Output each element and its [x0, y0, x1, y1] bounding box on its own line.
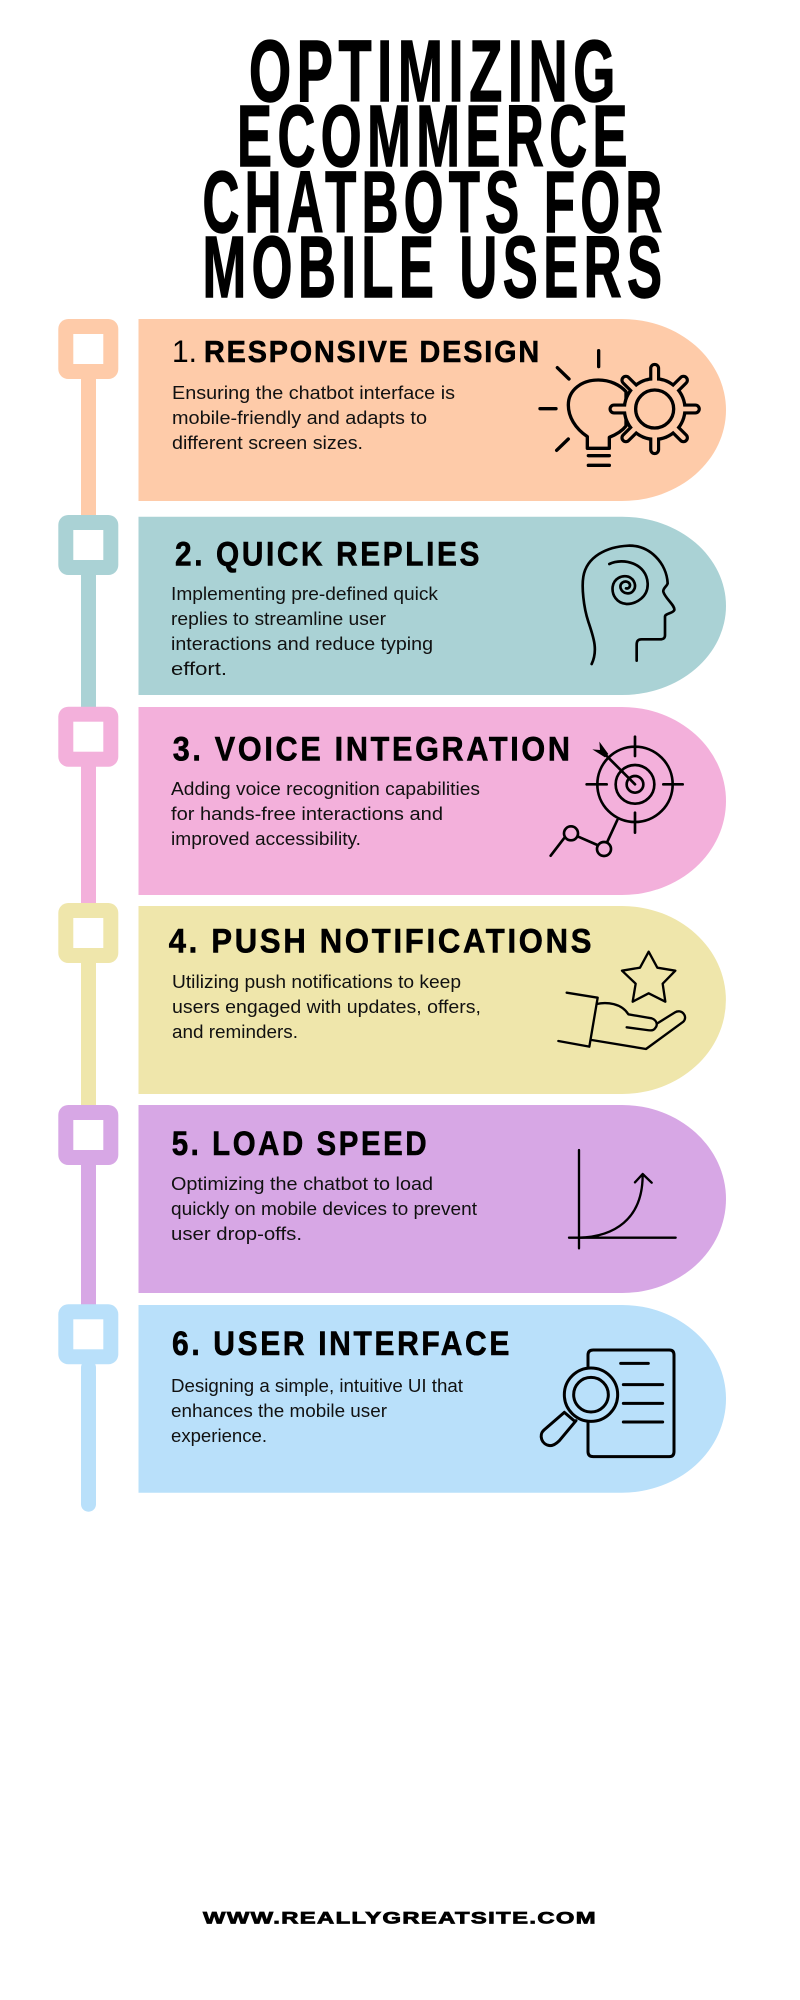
- heading: 3. VOICE INTEGRATION: [173, 730, 573, 768]
- panel: responsive design: [138, 319, 726, 501]
- card background: [138, 1105, 726, 1293]
- panel: voice integration: [138, 707, 726, 895]
- description: different screen sizes.: [172, 432, 363, 453]
- description: Adding voice recognition capabilities: [171, 778, 480, 799]
- timeline step 3 marker: [58, 707, 118, 906]
- icon: document with magnifier: [541, 1350, 674, 1457]
- heading: 4. PUSH NOTIFICATIONS: [169, 922, 594, 960]
- heading: 1.: [172, 333, 197, 369]
- description: Designing a simple, intuitive UI that: [171, 1375, 463, 1396]
- panel: load speed: [138, 1105, 726, 1293]
- description: Ensuring the chatbot interface is: [172, 382, 455, 403]
- description: Implementing pre-defined quick: [171, 583, 439, 604]
- description: [171, 1375, 463, 1446]
- description: quickly on mobile devices to prevent: [171, 1198, 477, 1219]
- description: [171, 1173, 477, 1244]
- card background: [138, 319, 726, 501]
- description: user drop-offs.: [171, 1223, 302, 1244]
- description: interactions and reduce typing: [171, 633, 433, 654]
- timeline step 6 marker: [58, 1304, 118, 1512]
- card background: [138, 906, 726, 1094]
- timeline: [58, 319, 118, 1512]
- heading: 2. QUICK REPLIES: [175, 535, 482, 573]
- description: Optimizing the chatbot to load: [171, 1173, 433, 1194]
- icon: hand holding star: [558, 952, 685, 1049]
- icon: light bulb and gear: [540, 351, 695, 465]
- footer url: WWW.REALLYGREATSITE.COM: [203, 1908, 597, 1927]
- description: [171, 778, 480, 849]
- card background: [138, 707, 726, 895]
- description: users engaged with updates, offers,: [172, 996, 481, 1017]
- description: improved accessibility.: [171, 828, 361, 849]
- description: for hands-free interactions and: [171, 803, 443, 824]
- heading: 5. LOAD SPEED: [172, 1125, 429, 1163]
- icon: head with spiral: [583, 546, 674, 664]
- panel: user interface: [138, 1305, 726, 1493]
- panel: push notifications: [138, 906, 726, 1094]
- description: enhances the mobile user: [171, 1400, 387, 1421]
- arrow fletching: [592, 742, 608, 757]
- description: experience.: [171, 1425, 267, 1446]
- description: and reminders.: [172, 1021, 298, 1042]
- title: [202, 23, 668, 316]
- description: mobile-friendly and adapts to: [172, 407, 427, 428]
- description: [172, 382, 455, 453]
- panel: quick replies: [138, 517, 726, 695]
- timeline step 4 marker: [58, 903, 118, 1108]
- card background: [138, 1305, 726, 1493]
- description: effort.: [171, 658, 227, 679]
- description: Utilizing push notifications to keep: [172, 971, 461, 992]
- heading: RESPONSIVE DESIGN: [204, 334, 541, 369]
- timeline step 2 marker: [58, 515, 118, 710]
- icon: growth chart: [569, 1150, 676, 1248]
- timeline step 5 marker: [58, 1105, 118, 1306]
- timeline step 1 marker: [58, 319, 118, 520]
- description: [172, 971, 481, 1042]
- description: replies to streamline user: [171, 608, 386, 629]
- description: [171, 583, 439, 679]
- icon: target with arrow and trend line: [551, 737, 683, 856]
- heading: 6. USER INTERFACE: [172, 1325, 512, 1363]
- card background: [138, 517, 726, 695]
